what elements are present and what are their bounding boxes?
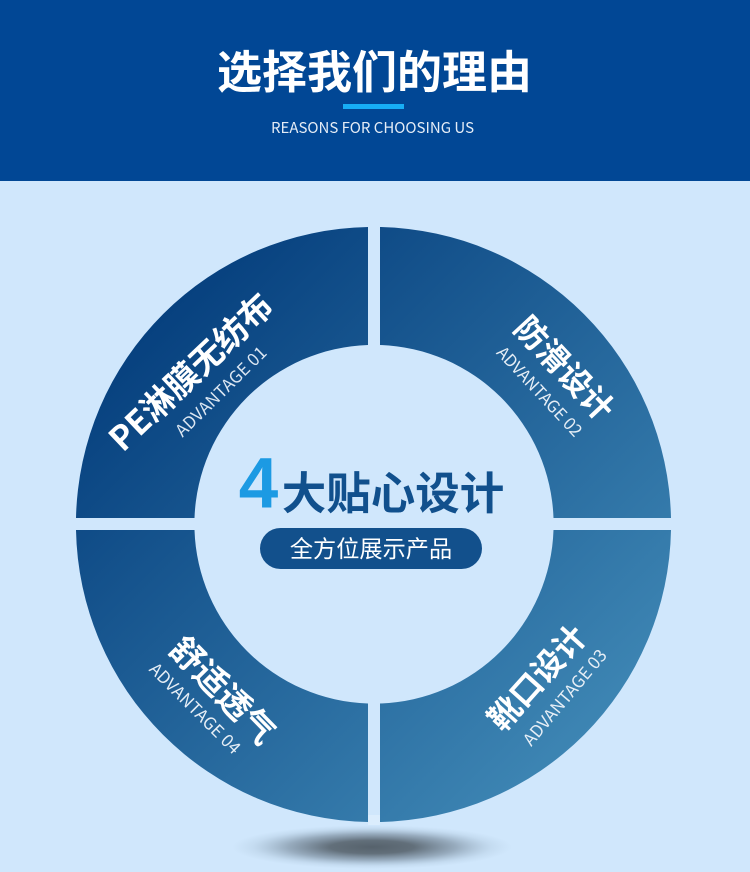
center block [239, 444, 504, 569]
heading: comfortable and breathable: 舒适透气 [160, 624, 289, 754]
subtitle: REASONS FOR CHOOSING US [271, 117, 474, 138]
label: advantage 03: ADVANTAGE 03 [516, 643, 612, 750]
panel: advantage 04 [76, 530, 368, 822]
panel: advantage 03 [380, 530, 671, 822]
title: 选择我们的理由 [217, 36, 532, 101]
label: advantage 01: ADVANTAGE 01 [168, 340, 271, 441]
heading: anti-slip design: 防滑设计 [505, 305, 626, 430]
center heading: 大贴心设计 [282, 457, 504, 522]
ground shadow [232, 825, 512, 869]
light strip under gap [368, 815, 380, 825]
label: advantage 04: ADVANTAGE 04 [145, 656, 247, 759]
pill badge [260, 528, 482, 569]
panel: advantage 02 [380, 227, 671, 518]
header panel [0, 0, 750, 181]
big number 4: 4 [239, 444, 279, 524]
panel: advantage 01 [76, 227, 368, 518]
heading: PE coated nonwoven: PE淋膜无纺布 [96, 280, 282, 460]
pill text: 全方位展示产品 [290, 530, 452, 564]
heading: boot opening design: 靴口设计 [476, 614, 596, 740]
title underline accent [343, 104, 404, 109]
label: advantage 02: ADVANTAGE 02 [492, 340, 588, 441]
